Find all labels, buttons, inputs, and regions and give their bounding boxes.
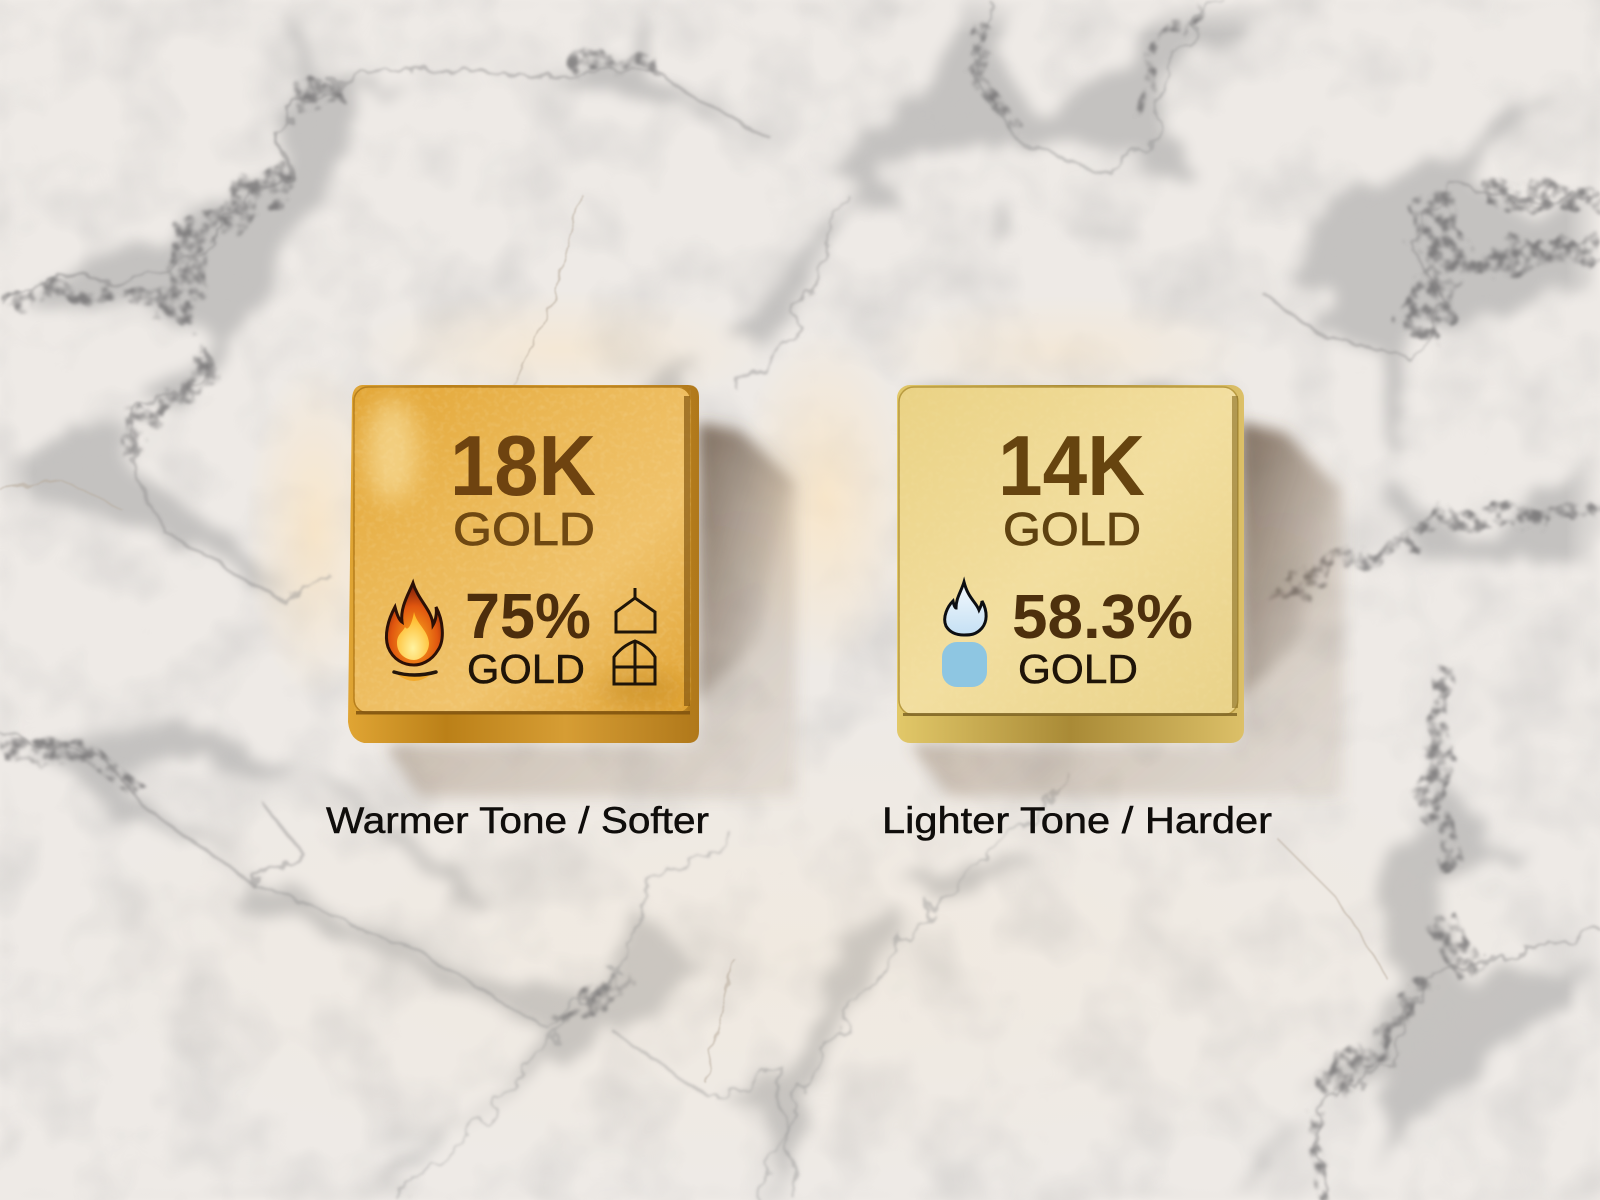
label: GOLD purity: GOLD bbox=[467, 646, 585, 692]
stat: 75%: 75% bbox=[465, 580, 591, 652]
icon: house outline bbox=[616, 588, 655, 632]
heading: 18K: 18K bbox=[450, 419, 596, 514]
caption: 18K: Warmer Tone / Softer bbox=[326, 800, 709, 841]
shadow: 14K bar bbox=[910, 422, 1343, 797]
label: GOLD purity: GOLD bbox=[1018, 646, 1138, 692]
icon: arched window bbox=[614, 641, 655, 684]
icon: cool flame bbox=[945, 582, 986, 635]
warm light pools bbox=[10, 290, 1590, 1195]
label: GOLD: GOLD bbox=[453, 503, 595, 555]
icon: water droplet bbox=[942, 642, 987, 687]
heading: 14K: 14K bbox=[998, 419, 1145, 514]
label: GOLD: GOLD bbox=[1003, 503, 1141, 555]
icon: flame bbox=[386, 583, 442, 681]
bar body: 18K bbox=[348, 385, 699, 743]
stat: 58.3%: 58.3% bbox=[1012, 583, 1193, 652]
bar body: 14K bbox=[897, 385, 1244, 743]
caption: 14K: Lighter Tone / Harder bbox=[882, 800, 1272, 841]
shadow: 18K bar bbox=[385, 422, 796, 797]
panel: 14K gold bar bbox=[897, 385, 1343, 797]
panel: 18K gold bar bbox=[348, 385, 796, 797]
